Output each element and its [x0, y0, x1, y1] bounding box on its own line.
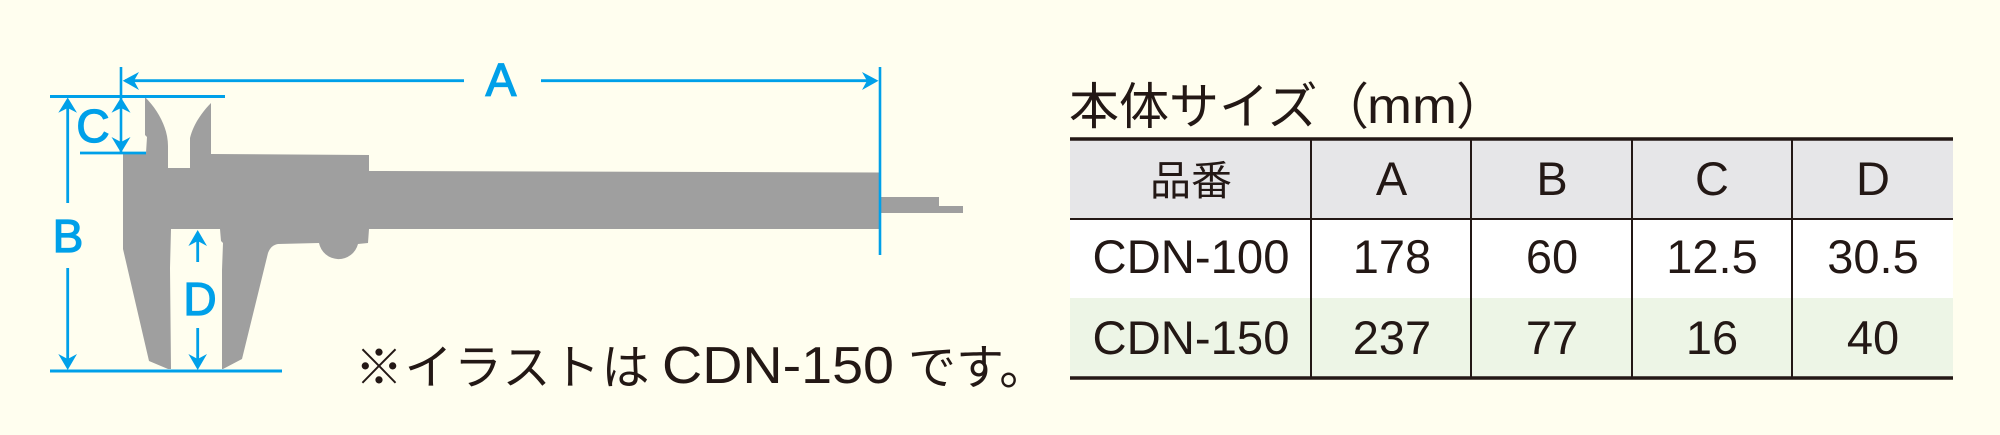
header labels: D: [1856, 152, 1890, 205]
header labels: B: [1536, 152, 1568, 205]
table title: 本体サイズ: [1069, 67, 1318, 139]
table title: mm: [1367, 78, 1457, 134]
dimension D: D: [183, 273, 217, 325]
row: CDN-150: CDN-150: [1092, 311, 1290, 364]
note text: です。: [908, 328, 1047, 398]
dimension C: [76, 98, 146, 153]
row: CDN-150: 237: [1353, 311, 1431, 364]
row: CDN-150: 40: [1847, 311, 1899, 364]
table title: [1069, 67, 1506, 139]
row: CDN-100: CDN-100: [1092, 230, 1290, 283]
row: CDN-150: 16: [1686, 311, 1738, 364]
row: CDN-100: 178: [1353, 230, 1431, 283]
row 2 background: [1070, 298, 1953, 378]
note text: [355, 328, 1047, 398]
row 1 background: [1070, 219, 1953, 298]
row: CDN-150: 77: [1526, 311, 1578, 364]
header labels: C: [1695, 152, 1729, 205]
dimension A: [121, 54, 880, 255]
header row background: [1070, 139, 1953, 219]
note text: ※イラストは: [355, 328, 651, 398]
row: CDN-100: 60: [1526, 230, 1578, 283]
diagram: caliper with dimensions: [50, 54, 963, 371]
header labels: [1150, 147, 1890, 207]
header labels: A: [1376, 152, 1408, 205]
size table: [1070, 139, 1953, 378]
note text: CDN-150: [662, 337, 894, 395]
row: CDN-150: [1092, 311, 1899, 364]
row: CDN-100: 30.5: [1827, 230, 1919, 283]
caliper silhouette: [123, 97, 963, 369]
dimension B: B: [53, 210, 83, 262]
dimension C: C: [76, 100, 110, 152]
table title: ）: [1456, 67, 1506, 139]
dimension D: [183, 230, 217, 370]
dimension A: A: [486, 54, 517, 106]
table title: （: [1319, 67, 1369, 139]
row: CDN-100: 12.5: [1666, 230, 1758, 283]
row: CDN-100: [1092, 230, 1919, 283]
header labels: 品番: [1150, 147, 1232, 207]
dimension B: [50, 96, 282, 371]
